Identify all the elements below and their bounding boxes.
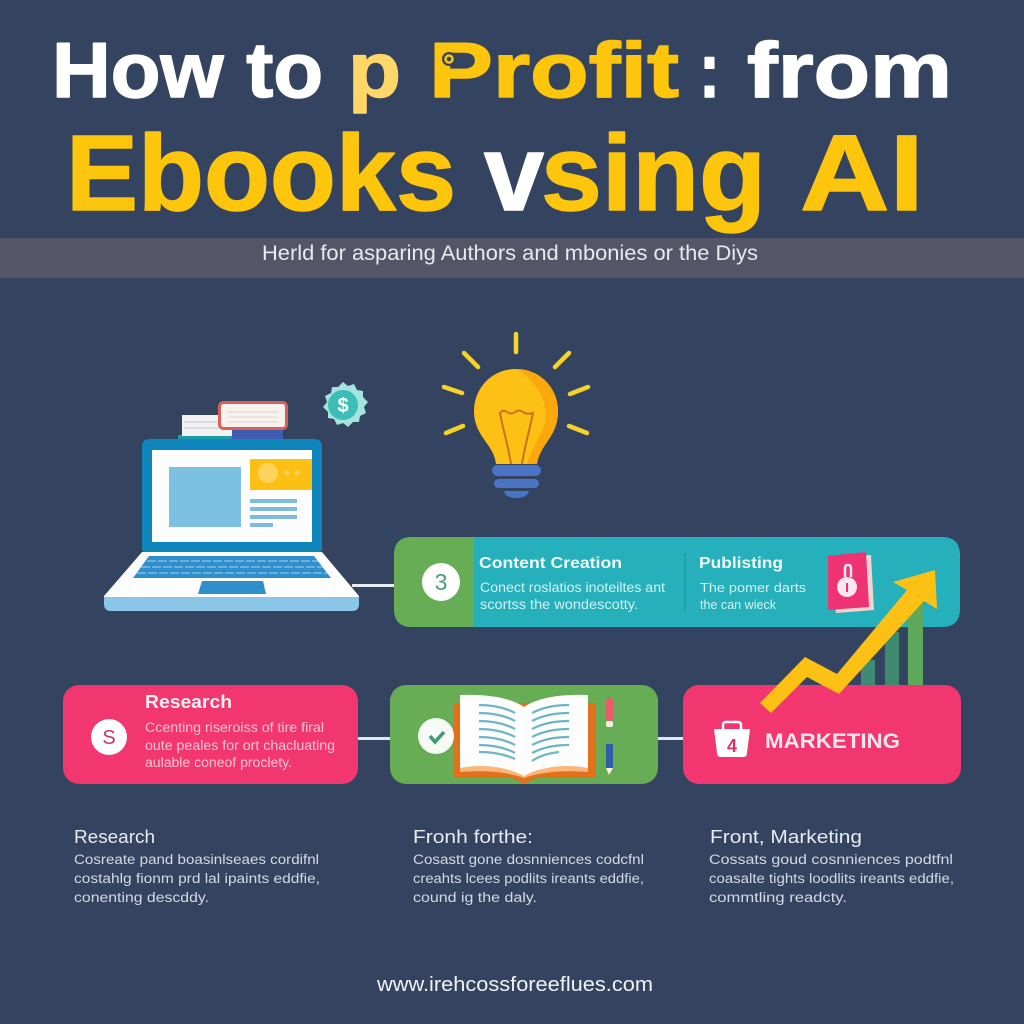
text block: research: costahlg fionm prd lal ipaints eddfie, <box>74 871 320 886</box>
text block: front marketing: Cossats goud cosnniences podtfnl <box>709 852 953 867</box>
panel: marketing: MARKETING <box>765 730 900 753</box>
panel: content creation and publishing: The pomer darts <box>700 580 807 595</box>
icon: open book <box>454 695 596 784</box>
title: How to <box>52 26 323 114</box>
panel: content creation and publishing: Content Creation <box>479 555 622 572</box>
panel: research: S <box>102 727 116 749</box>
panel: research <box>63 685 358 784</box>
icon: check badge <box>418 718 454 754</box>
text block: research: Cosreate pand boasinlseaes cordifnl <box>74 852 319 867</box>
text block: front for the <box>413 827 644 905</box>
panel: content creation and publishing: scortss the wondescotty. <box>480 597 638 612</box>
subtitle band <box>0 238 1024 278</box>
icon: shopping bag <box>714 722 750 757</box>
chart bars behind arrow <box>861 602 923 686</box>
text block: research: conenting descddy. <box>74 890 209 905</box>
arrow: rising trend <box>760 570 937 713</box>
text block: research <box>74 827 320 905</box>
text block: front for the: Fronh forthe: <box>413 827 533 847</box>
title: AI <box>800 112 924 233</box>
text block: front marketing: Front, Marketing <box>710 827 862 847</box>
title <box>52 26 952 233</box>
title: Profit <box>429 26 679 114</box>
panel: content creation and publishing <box>394 537 960 627</box>
title: sing <box>541 112 766 233</box>
icon: shopping bag: 4 <box>727 736 737 756</box>
title: v <box>484 112 544 233</box>
text block: front for the: Cosastt gone dosnniences codcfnl <box>413 852 644 867</box>
subtitle band: Herld for asparing Authors and mbonies or the Diys <box>262 242 758 265</box>
icon: lightbulb <box>444 334 588 498</box>
panel: research: oute peales for ort chacluating <box>145 738 335 753</box>
icon: pink book with lock <box>828 552 874 613</box>
panel: content creation and publishing: 3 <box>435 569 447 595</box>
title: from <box>747 26 952 114</box>
icon: laptop <box>104 439 359 611</box>
panel: green book <box>390 685 658 784</box>
text block: front marketing <box>709 827 954 905</box>
panel: content creation and publishing: Conect roslatios inoteiltes ant <box>480 580 665 595</box>
panel: research: aulable coneof proclety. <box>145 755 292 770</box>
icon: books on laptop <box>178 402 286 440</box>
connector: book to marketing <box>658 737 684 740</box>
title: Ebooks <box>66 112 456 233</box>
text block: front for the: cound ig the daly. <box>413 890 537 905</box>
panel: research: Ccenting riseroiss of tire firal <box>145 720 324 735</box>
text block: research: Research <box>74 827 155 847</box>
footer url: www.irehcossforeeflues.com <box>376 974 653 996</box>
connector: research to book <box>358 737 391 740</box>
icon: dollar gear <box>323 382 368 427</box>
text block: front for the: creahts lcees podlits ireants eddfie, <box>413 871 644 886</box>
title: p <box>348 26 401 114</box>
text block: front marketing: commtling readcty. <box>709 890 847 905</box>
icon: red pencil <box>606 698 613 727</box>
panel: content creation and publishing: the can wieck <box>700 597 776 612</box>
icon: blue pencil <box>606 744 613 775</box>
icon: dollar gear: $ <box>337 395 349 417</box>
text block: front marketing: coasalte tights loodlits ireants eddfie, <box>709 871 954 886</box>
panel: marketing <box>683 685 961 784</box>
panel: content creation and publishing: Publisting <box>699 555 783 572</box>
panel: research: Research <box>145 692 232 712</box>
title: : <box>699 26 720 114</box>
connector: laptop to content panel <box>352 584 394 587</box>
